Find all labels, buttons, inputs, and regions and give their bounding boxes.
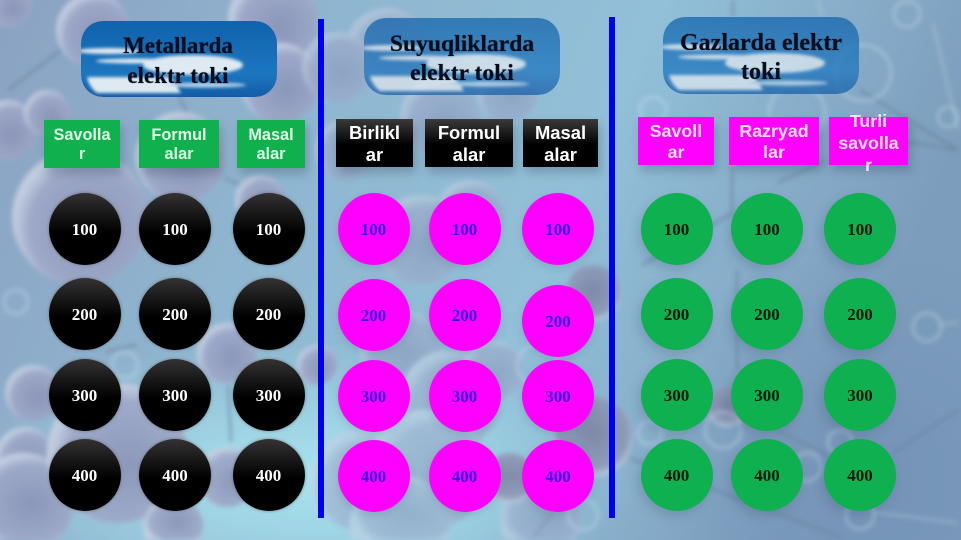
- header Formulalar: Formul: [438, 122, 500, 143]
- circle: [522, 360, 594, 432]
- circle: 200: [664, 305, 689, 324]
- circle: 400: [754, 466, 780, 485]
- column headers: Suyuqliklarda: [336, 119, 605, 177]
- header Turli savollar: [829, 117, 908, 165]
- header Savollar: [638, 117, 714, 165]
- circle: 400: [847, 466, 873, 485]
- circle: [731, 439, 803, 511]
- circle: [232, 439, 304, 511]
- circle: 200: [847, 305, 873, 324]
- banner heading: Gazlarda elektr: [680, 30, 842, 56]
- circle: [428, 360, 500, 432]
- circle: [139, 278, 211, 350]
- circle: [824, 192, 896, 264]
- score circles: Gazlarda: [636, 193, 896, 517]
- circle: 300: [545, 387, 571, 406]
- header Birliklar: Birlikl: [349, 122, 400, 143]
- circle: [48, 192, 120, 264]
- circle: 200: [162, 305, 188, 324]
- banner heading: elektr toki: [127, 63, 229, 88]
- circle: [338, 360, 410, 432]
- circle: 200: [452, 306, 477, 325]
- circle: [522, 440, 594, 512]
- circle: [48, 439, 120, 511]
- circle: [139, 192, 211, 264]
- circle: [824, 439, 896, 511]
- circle: [640, 278, 712, 350]
- header Birliklar: [336, 119, 413, 167]
- circle: 400: [256, 466, 281, 485]
- score circles: Suyuqliklarda: [336, 193, 595, 516]
- divider left: [318, 19, 324, 518]
- circle: 100: [664, 220, 689, 238]
- banner image: [663, 17, 859, 94]
- header Masalalar: alar: [544, 144, 577, 165]
- header Formulalar: alar: [453, 144, 485, 165]
- circle: [640, 192, 712, 264]
- circle: [428, 440, 500, 512]
- circle: 200: [72, 305, 97, 324]
- circle: 100: [452, 220, 477, 239]
- circle: 400: [452, 467, 477, 486]
- banner image: [364, 18, 560, 95]
- header Razryadlar: Razryad: [739, 121, 809, 141]
- circle: [640, 359, 712, 431]
- header Turli savollar: savolla: [838, 133, 899, 153]
- circle: 100: [545, 220, 571, 239]
- banner: Metallarda elektr toki: [81, 21, 277, 97]
- circle: [428, 279, 500, 351]
- circle: [48, 359, 120, 431]
- header Formulalar: [139, 120, 219, 168]
- circle: 400: [162, 466, 188, 485]
- circle: 400: [545, 467, 571, 486]
- circle: [522, 193, 594, 265]
- circle: [428, 193, 500, 265]
- score circles: Metallarda: [47, 191, 307, 513]
- circle: 400: [72, 466, 97, 485]
- circle: [522, 285, 594, 357]
- circle: 300: [361, 387, 386, 406]
- header Masalalar: Masal: [248, 126, 294, 144]
- circle: 200: [256, 305, 281, 324]
- header Masalalar: [237, 120, 305, 168]
- header Savollar: r: [79, 145, 85, 163]
- banner heading: Metallarda: [123, 33, 233, 58]
- header Masalalar: Masal: [535, 122, 586, 143]
- circle: [338, 440, 410, 512]
- header Savollar: Savolla: [53, 126, 111, 144]
- circle: [338, 279, 410, 351]
- circle: 400: [361, 467, 386, 486]
- circle: [731, 278, 803, 350]
- circle: 200: [545, 312, 571, 331]
- circle: 100: [847, 220, 873, 238]
- circle: 100: [162, 220, 188, 238]
- circle: 300: [72, 386, 97, 405]
- circle: 100: [72, 220, 97, 238]
- circle: [48, 278, 120, 350]
- circle: [338, 193, 410, 265]
- header Formulalar: Formul: [151, 126, 207, 144]
- banner: Gazlarda elektr toki: [663, 17, 859, 94]
- header Formulalar: alar: [164, 145, 193, 163]
- circle: [139, 439, 211, 511]
- circle: 100: [256, 220, 281, 238]
- banner heading: [123, 33, 233, 88]
- circle: 300: [847, 386, 873, 405]
- circle: 300: [664, 386, 689, 405]
- divider right: [608, 17, 615, 518]
- banner: Suyuqliklarda elektr toki: [364, 18, 560, 95]
- header Formulalar: [425, 119, 513, 167]
- circle: [232, 192, 304, 264]
- header Masalalar: alar: [256, 145, 285, 163]
- banner heading: [680, 30, 842, 85]
- circle: 100: [754, 220, 780, 238]
- circle: 200: [361, 306, 386, 325]
- header Savollar: Savoll: [650, 121, 702, 141]
- circle: 200: [754, 305, 780, 324]
- header Razryadlar: lar: [763, 142, 785, 162]
- circle: [232, 359, 304, 431]
- banner image: [81, 21, 277, 97]
- header Turli savollar: r: [865, 155, 872, 175]
- circle: 300: [754, 386, 780, 405]
- circle: 400: [664, 466, 689, 485]
- circle: 300: [452, 387, 477, 406]
- circle: [139, 359, 211, 431]
- column headers: Gazlarda: [637, 111, 914, 175]
- circle: [824, 359, 896, 431]
- circle: [640, 439, 712, 511]
- banner heading: toki: [741, 59, 781, 85]
- circle: 300: [256, 386, 281, 405]
- circle: 100: [361, 220, 386, 239]
- circle: [731, 192, 803, 264]
- header Savollar: [44, 120, 120, 168]
- header Birliklar: ar: [366, 144, 383, 165]
- banner heading: Suyuqliklarda: [390, 31, 534, 57]
- column headers: Metallarda: [43, 120, 312, 178]
- header Turli savollar: Turli: [850, 111, 887, 131]
- header Razryadlar: [729, 117, 819, 165]
- header Masalalar: [523, 119, 598, 167]
- circle: [232, 278, 304, 350]
- header Savollar: ar: [668, 142, 684, 162]
- banner heading: [390, 31, 534, 86]
- banner heading: elektr toki: [410, 60, 514, 86]
- circle: [731, 359, 803, 431]
- circle: 300: [162, 386, 188, 405]
- circle: [824, 278, 896, 350]
